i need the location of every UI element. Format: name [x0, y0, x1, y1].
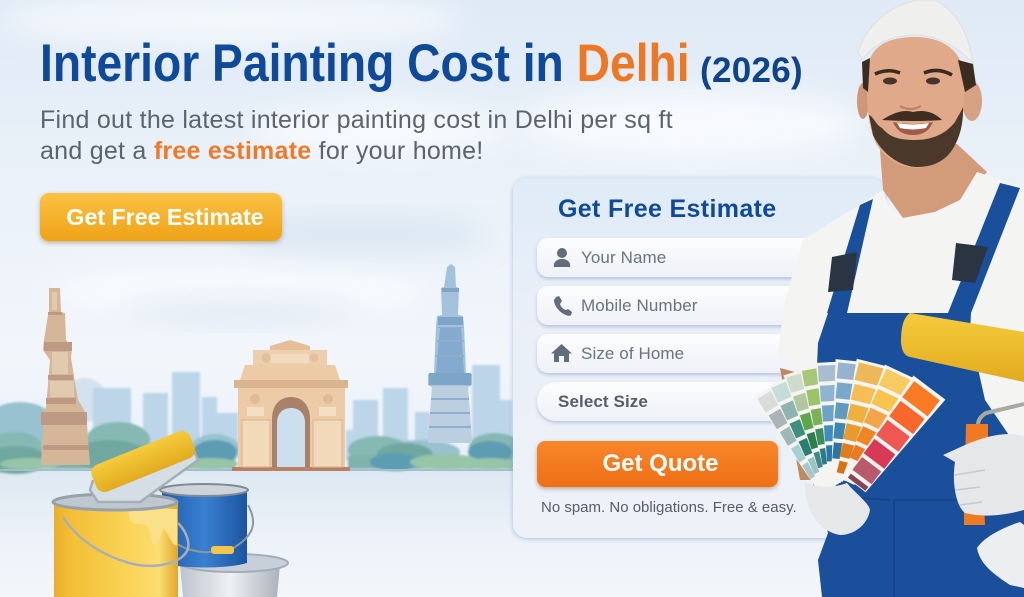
form heading: Get Free Estimate	[558, 195, 777, 223]
neck	[880, 144, 987, 218]
landmark: India Gate	[232, 340, 350, 471]
cap	[858, 0, 973, 63]
yellow can	[53, 494, 188, 597]
field: mobile number: Mobile Number	[581, 296, 698, 315]
moustache and smile	[882, 111, 942, 121]
landmark: tower	[428, 264, 472, 443]
glove right	[943, 434, 1024, 516]
button: get free estimate	[40, 193, 282, 241]
landmark: Qutub Minar	[41, 288, 90, 465]
field: your name: Your Name	[581, 248, 666, 267]
button: get quote: Get Quote	[602, 450, 718, 477]
form note: No spam. No obligations. Free & easy.	[541, 499, 797, 516]
field: select size	[537, 382, 827, 421]
panel: estimate form	[513, 178, 885, 538]
glove lower	[977, 522, 1024, 588]
head	[857, 37, 982, 168]
hair	[862, 58, 976, 92]
eyes and brows	[875, 70, 952, 75]
icon: home	[551, 344, 572, 362]
field: size of home	[537, 334, 827, 373]
illustration: paint cans and roller	[52, 430, 289, 597]
shirt	[777, 172, 1024, 450]
glove left	[805, 482, 870, 535]
overalls	[812, 313, 1024, 597]
title: Interior Painting Cost in Delhi	[40, 34, 690, 93]
color swatch fan	[754, 359, 945, 500]
buckles	[828, 243, 988, 292]
title: (2026)	[700, 51, 803, 90]
field: mobile number	[537, 286, 827, 325]
skyline	[63, 365, 512, 460]
silver can	[180, 554, 288, 597]
subtitle text: Find out the latest interior painting cost in Delhi per sq ft	[40, 106, 673, 134]
subtitle text: and get a free estimate for your home!	[40, 137, 483, 165]
icon: phone	[554, 296, 572, 316]
trees	[0, 402, 521, 474]
blue can	[160, 484, 253, 568]
subtitle text	[40, 106, 673, 165]
button: get free estimate: Get Free Estimate	[66, 204, 264, 230]
orange handle	[978, 404, 1024, 425]
icon: person	[554, 248, 570, 267]
roller	[89, 428, 198, 495]
field: size of home: Size of Home	[581, 344, 684, 363]
beard	[869, 107, 963, 167]
big roller	[901, 313, 1024, 382]
arm	[780, 368, 820, 480]
button: get quote	[537, 441, 778, 487]
field: your name	[537, 238, 827, 277]
field: select size: Select Size	[558, 392, 648, 411]
illustration: painter	[754, 0, 1024, 597]
roller frame	[90, 448, 198, 502]
